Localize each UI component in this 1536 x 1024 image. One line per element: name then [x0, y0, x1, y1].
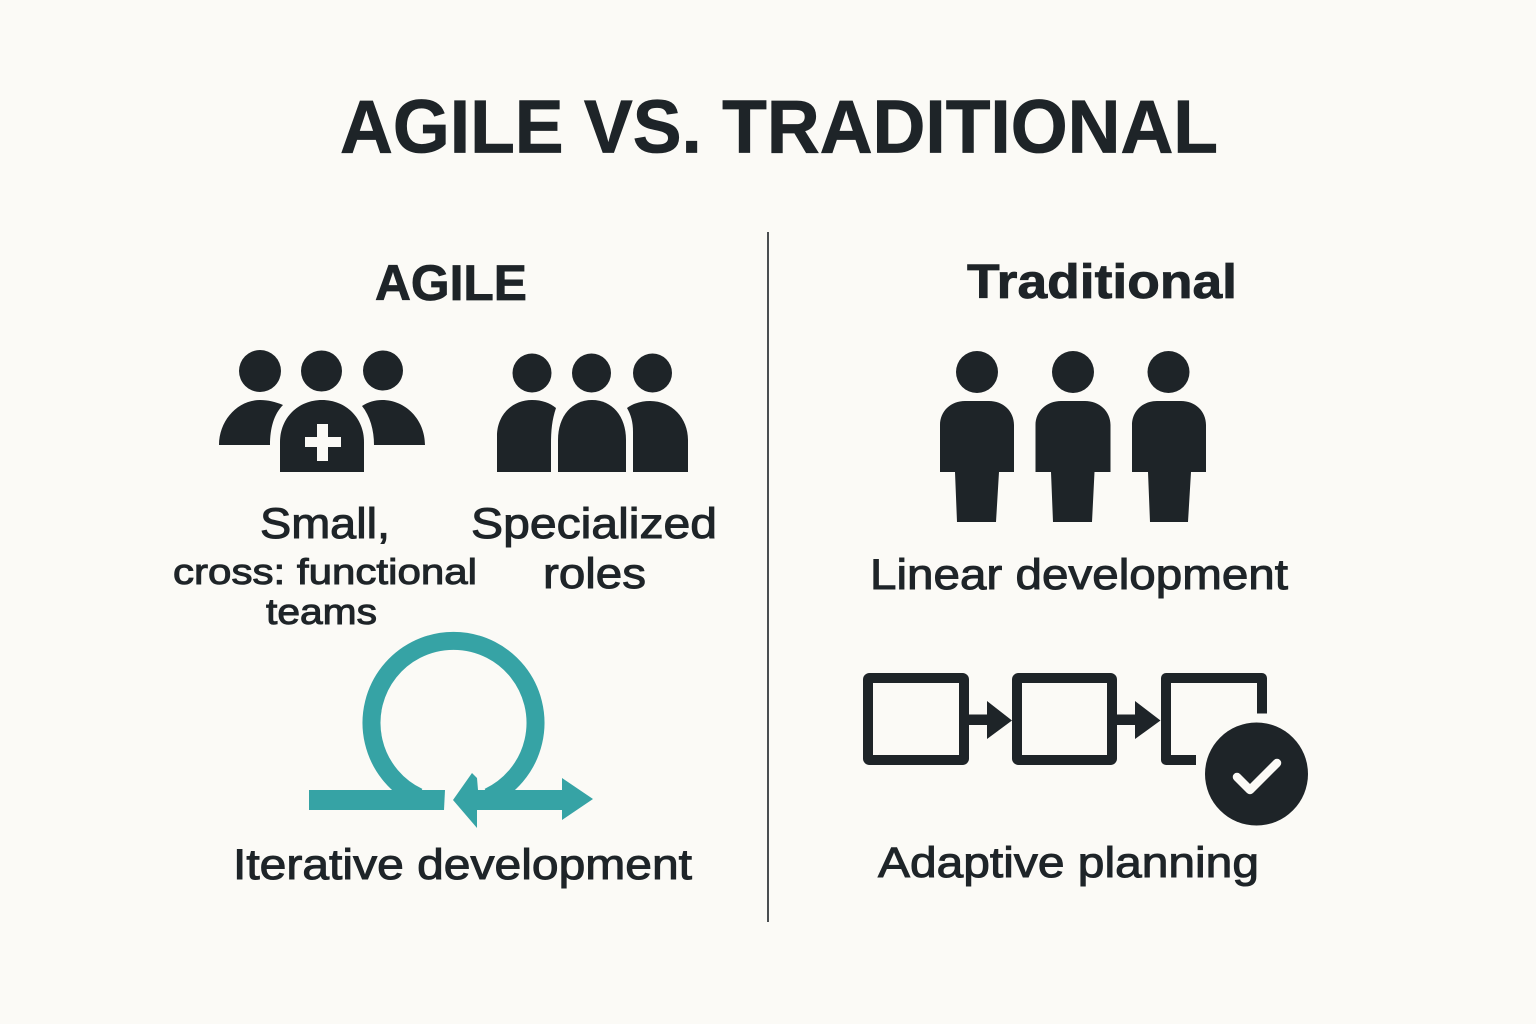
label: small cross-functional teams	[173, 500, 477, 632]
label: iterative development: Iterative development	[233, 841, 692, 889]
label: small cross-functional teams: teams	[266, 591, 377, 632]
label: linear development: Linear development	[870, 551, 1288, 599]
label: specialized roles: Specialized	[471, 500, 717, 548]
panel: traditional	[868, 256, 1308, 887]
title: AGILE VS. TRADITIONAL	[340, 84, 1218, 168]
icon: process boxes with check badge	[868, 678, 1308, 826]
panel: agile	[173, 255, 717, 889]
icon: cross-functional team	[219, 350, 425, 472]
label: small cross-functional teams: cross: functional	[173, 551, 477, 592]
label: specialized roles: roles	[543, 550, 646, 598]
icon: iterative loop arrow	[309, 641, 593, 828]
icon: specialized roles team	[497, 354, 688, 472]
label: small cross-functional teams: Small,	[260, 500, 390, 548]
heading: traditional: Traditional	[967, 256, 1237, 309]
icon: three standing people	[940, 351, 1206, 522]
label: adaptive planning: Adaptive planning	[878, 839, 1259, 887]
label: specialized roles	[471, 500, 717, 598]
heading: agile: AGILE	[375, 255, 527, 311]
